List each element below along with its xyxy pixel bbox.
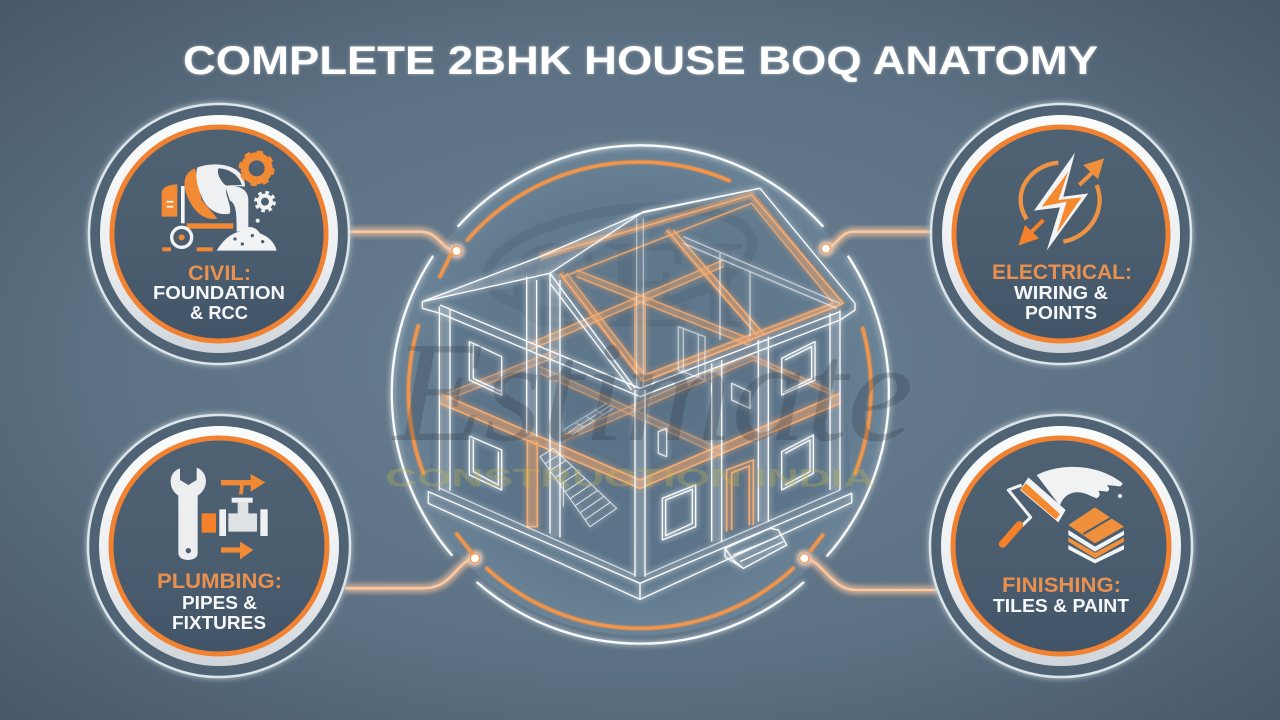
house walls fill [428,305,852,583]
entry steps [725,528,787,568]
watermark: script: Estimate [391,313,913,472]
connector: plumbing [345,554,480,588]
connector: electrical [821,232,930,253]
label: civil: FOUNDATION [153,283,285,303]
windows [469,342,502,395]
inner orange ring arcs [408,162,871,628]
watermark: logo swoosh [481,192,759,355]
columns [635,390,645,577]
label: electrical: ELECTRICAL: [992,261,1132,284]
icon: lightning bolt with arrows [1018,153,1104,251]
center backdrop [395,146,885,636]
watermark: logo swoosh: CEI [507,215,747,355]
orange structural beams [440,195,843,532]
panel: electrical [931,104,1191,364]
label: plumbing: PLUMBING: [157,570,282,593]
panel: finishing [930,415,1192,677]
label: civil: & RCC [190,303,248,323]
roof outline [422,188,855,303]
label: finishing [993,574,1129,616]
translucent beam bands [440,195,840,527]
label: civil: CIVIL: [188,262,251,285]
label: electrical: POINTS [1025,303,1097,323]
label: plumbing: FIXTURES [172,613,266,633]
connector: civil [350,232,461,256]
white wireframe [422,188,855,599]
icon: wrench and valve [171,468,268,560]
label: plumbing [157,570,282,633]
connector: finishing [800,554,940,590]
translucent column bands [422,212,840,577]
central house diagram [345,145,940,644]
panel: plumbing [88,415,350,677]
icon: paint roller and tiles [1003,467,1124,563]
watermark: script: CONSTRUCTION INDIA [385,465,875,493]
icon: concrete mixer [162,153,277,251]
outer white ring arcs [392,145,889,644]
stairs [540,448,617,527]
label: electrical [992,261,1132,323]
panel: civil [89,104,349,364]
label: finishing: FINISHING: [1002,574,1121,597]
label: electrical: WIRING & [1014,283,1108,303]
label: finishing: TILES & PAINT [993,596,1129,616]
title: COMPLETE 2BHK HOUSE BOQ ANATOMY [183,39,1098,83]
label: plumbing: PIPES & [182,593,257,613]
label: civil [153,262,285,323]
roof beams [440,305,840,397]
plinth [428,492,852,599]
